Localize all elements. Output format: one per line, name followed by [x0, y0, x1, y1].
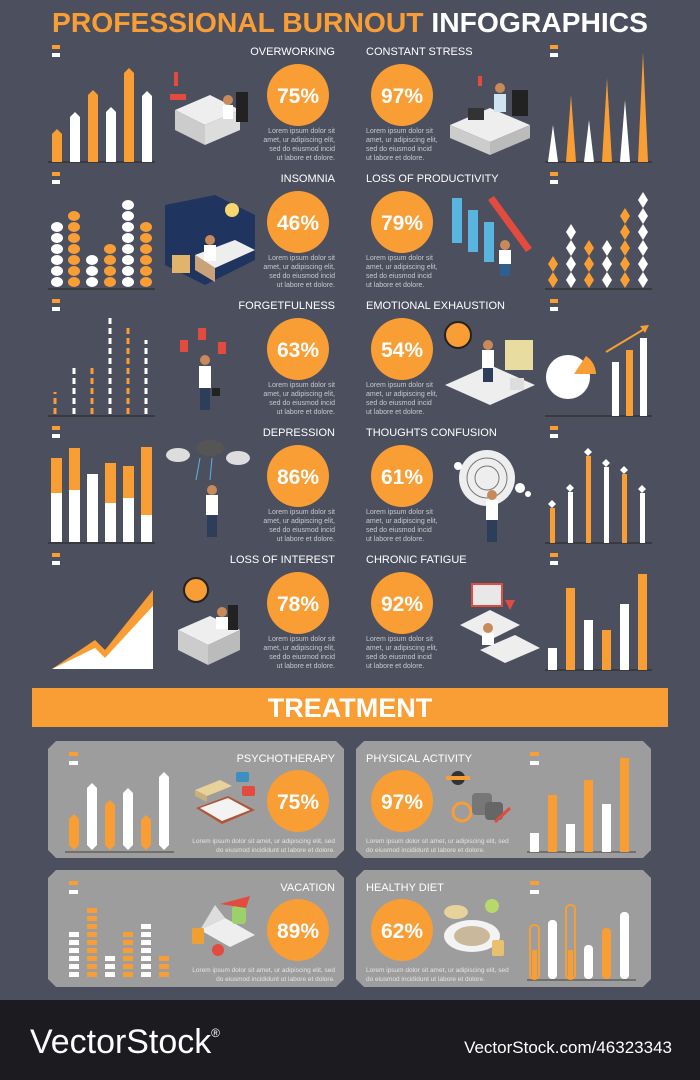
label: EMOTIONAL EXHAUSTION	[366, 300, 505, 312]
illustration: food plate	[444, 899, 504, 956]
legend	[530, 881, 539, 894]
text: Lorem ipsum dolor sit amet, ur adipiscing elit, sed	[192, 967, 335, 974]
percent	[267, 318, 329, 380]
text	[263, 382, 335, 416]
text: Lorem ipsum dolor sit	[366, 255, 433, 262]
legend	[52, 553, 60, 565]
text: amet, ur adipiscing elit,	[366, 264, 438, 271]
label: CHRONIC FATIGUE	[366, 554, 467, 566]
panel: physical activity	[356, 741, 651, 858]
text	[192, 838, 335, 854]
text	[366, 255, 438, 289]
footer: VectorStock.com/46323343	[464, 1038, 672, 1057]
text: Lorem ipsum dolor sit	[366, 382, 433, 389]
legend	[550, 553, 558, 565]
percent: 61%	[381, 466, 423, 489]
treatment banner: TREATMENT	[268, 693, 433, 723]
text: Lorem ipsum dolor sit	[366, 636, 433, 643]
percent	[267, 445, 329, 507]
text: amet, ur adipiscing elit,	[263, 137, 335, 144]
label: LOSS OF INTEREST	[230, 554, 335, 566]
text: Lorem ipsum dolor sit	[268, 255, 335, 262]
text: sed do eiusmod incid	[269, 273, 335, 280]
label: VACATION	[280, 882, 335, 894]
text	[263, 636, 335, 670]
text	[366, 838, 509, 854]
chart: spikes	[545, 52, 652, 162]
text: ut labore et dolore.	[277, 663, 335, 670]
footer: ®	[211, 1026, 220, 1040]
text: ut labore et dolore.	[277, 409, 335, 416]
chart	[65, 772, 174, 852]
illustration: couch and clipboard	[195, 772, 255, 824]
text	[263, 255, 335, 289]
text	[366, 967, 509, 983]
panel: psychotherapy	[48, 741, 344, 858]
footer	[0, 1000, 700, 1080]
text: Lorem ipsum dolor sit	[268, 382, 335, 389]
chart	[527, 758, 636, 852]
legend	[52, 45, 60, 57]
legend	[550, 299, 558, 311]
text: sed do eiusmod incid	[269, 146, 335, 153]
percent	[267, 191, 329, 253]
percent: 92%	[381, 593, 423, 616]
chart: dashed lines	[48, 315, 155, 416]
row 1 right: constant stress	[366, 45, 652, 162]
illustration: fatigue papers	[460, 584, 540, 663]
text: ut labore et dolore.	[277, 536, 335, 543]
text: sed do eiusmod incid	[269, 400, 335, 407]
percent: 79%	[381, 212, 423, 235]
illustration: falling bars	[452, 196, 532, 276]
text: amet, ur adipiscing elit,	[263, 518, 335, 525]
text: amet, ur adipiscing elit,	[366, 391, 438, 398]
chart: stacked blocks	[69, 908, 169, 977]
chart: arrow bars	[48, 68, 155, 162]
text: ut labore et dolore.	[366, 155, 424, 162]
panel: vacation	[48, 870, 344, 987]
text: sed do eiusmod incid	[366, 146, 432, 153]
legend	[550, 172, 558, 184]
percent: 97%	[381, 85, 423, 108]
text	[366, 509, 438, 543]
text: sed do eiusmod incid	[366, 400, 432, 407]
percent: 62%	[381, 920, 423, 943]
percent	[371, 64, 433, 126]
percent	[267, 64, 329, 126]
row 4 right: thoughts confusion	[366, 426, 652, 543]
illustration: desk	[450, 76, 530, 155]
chart: bars	[545, 574, 652, 670]
text: amet, ur adipiscing elit,	[366, 137, 438, 144]
chart: outline bars	[527, 905, 636, 980]
footer: VectorStock	[30, 1023, 211, 1061]
row 2 left: insomnia	[48, 172, 336, 289]
percent	[267, 899, 329, 961]
text: Lorem ipsum dolor sit amet, ur adipiscing elit, sed	[366, 967, 509, 974]
label: CONSTANT STRESS	[366, 46, 473, 58]
text: ut labore et dolore.	[366, 536, 424, 543]
label: OVERWORKING	[250, 46, 335, 58]
text: do eiusmod incididunt ut labore et dolore.	[366, 847, 485, 854]
text: sed do eiusmod incid	[366, 654, 432, 661]
percent: 86%	[277, 466, 319, 489]
percent: 46%	[277, 212, 319, 235]
text: do eiusmod incididunt ut labore et dolore.	[216, 847, 335, 854]
label: PSYCHOTHERAPY	[237, 753, 336, 765]
row 3 right: emotional exhaustion	[366, 299, 652, 416]
label: DEPRESSION	[263, 427, 335, 439]
row 2 right: loss of productivity	[366, 172, 652, 289]
label: INSOMNIA	[281, 173, 336, 185]
illustration: deck chair	[192, 896, 255, 956]
percent: 75%	[277, 791, 319, 814]
row 3 left: forgetfulness	[48, 299, 335, 416]
text: ut labore et dolore.	[366, 409, 424, 416]
text	[366, 636, 438, 670]
legend	[52, 172, 60, 184]
text: do eiusmod incididunt ut labore et dolore.	[366, 976, 485, 983]
percent: 78%	[277, 593, 319, 616]
percent	[371, 445, 433, 507]
text: Lorem ipsum dolor sit	[268, 636, 335, 643]
row 4 left: depression	[48, 426, 335, 543]
percent	[371, 899, 433, 961]
label: HEALTHY DIET	[366, 882, 444, 894]
illustration: forgetful man	[180, 328, 226, 410]
percent: 97%	[381, 791, 423, 814]
treatment banner	[32, 688, 668, 727]
legend	[550, 45, 558, 57]
panel: healthy diet	[356, 870, 651, 987]
text: sed do eiusmod incid	[269, 654, 335, 661]
row 1 left: overworking	[48, 45, 335, 162]
title: PROFESSIONAL BURNOUT INFOGRAPHICS	[52, 7, 648, 38]
text: Lorem ipsum dolor sit	[268, 509, 335, 516]
illustration: confusion	[454, 450, 531, 542]
legend	[530, 752, 539, 765]
text	[263, 509, 335, 543]
text: ut labore et dolore.	[277, 282, 335, 289]
percent: 54%	[381, 339, 423, 362]
legend	[52, 299, 60, 311]
text: amet, ur adipiscing elit,	[263, 391, 335, 398]
legend	[550, 426, 558, 438]
illustration: exhaustion	[445, 322, 535, 405]
illustration: fitness	[446, 771, 510, 822]
chart: pie and bars	[545, 325, 652, 416]
percent: 89%	[277, 920, 319, 943]
percent	[371, 318, 433, 380]
text: do eiusmod incididunt ut labore et dolore.	[216, 976, 335, 983]
text: Lorem ipsum dolor sit	[366, 128, 433, 135]
label: LOSS OF PRODUCTIVITY	[366, 173, 499, 185]
text: amet, ur adipiscing elit,	[263, 264, 335, 271]
text: Lorem ipsum dolor sit amet, ur adipiscing elit, sed	[366, 838, 509, 845]
percent	[371, 572, 433, 634]
legend	[52, 426, 60, 438]
label: FORGETFULNESS	[238, 300, 335, 312]
text	[366, 382, 438, 416]
row 5 left: loss of interest	[52, 553, 335, 670]
chart: diamonds	[545, 192, 652, 289]
percent: 63%	[277, 339, 319, 362]
percent	[267, 572, 329, 634]
legend	[69, 752, 78, 765]
illustration: loss of interest desk	[178, 578, 240, 665]
label: PHYSICAL ACTIVITY	[366, 753, 473, 765]
chart: stacked bars	[48, 447, 155, 543]
chart: thin bars with diamonds	[545, 448, 652, 543]
illustration: overworking	[170, 72, 248, 145]
illustration: night bedroom	[165, 195, 255, 285]
text	[366, 128, 438, 162]
chart: stacked circles	[48, 200, 155, 289]
percent	[371, 770, 433, 832]
text: sed do eiusmod incid	[366, 273, 432, 280]
text: sed do eiusmod incid	[366, 527, 432, 534]
text: amet, ur adipiscing elit,	[366, 645, 438, 652]
text: ut labore et dolore.	[366, 282, 424, 289]
legend	[69, 881, 78, 894]
text	[263, 128, 335, 162]
text: Lorem ipsum dolor sit amet, ur adipiscing elit, sed	[192, 838, 335, 845]
label: THOUGHTS CONFUSION	[366, 427, 497, 439]
chart: area	[52, 590, 153, 669]
percent: 75%	[277, 85, 319, 108]
text: sed do eiusmod incid	[269, 527, 335, 534]
text	[192, 967, 335, 983]
text: amet, ur adipiscing elit,	[263, 645, 335, 652]
text: amet, ur adipiscing elit,	[366, 518, 438, 525]
row 5 right: chronic fatigue	[366, 553, 652, 670]
percent	[371, 191, 433, 253]
text: Lorem ipsum dolor sit	[366, 509, 433, 516]
illustration: depression clouds	[166, 440, 250, 537]
text: Lorem ipsum dolor sit	[268, 128, 335, 135]
text: ut labore et dolore.	[277, 155, 335, 162]
percent	[267, 770, 329, 832]
text: ut labore et dolore.	[366, 663, 424, 670]
